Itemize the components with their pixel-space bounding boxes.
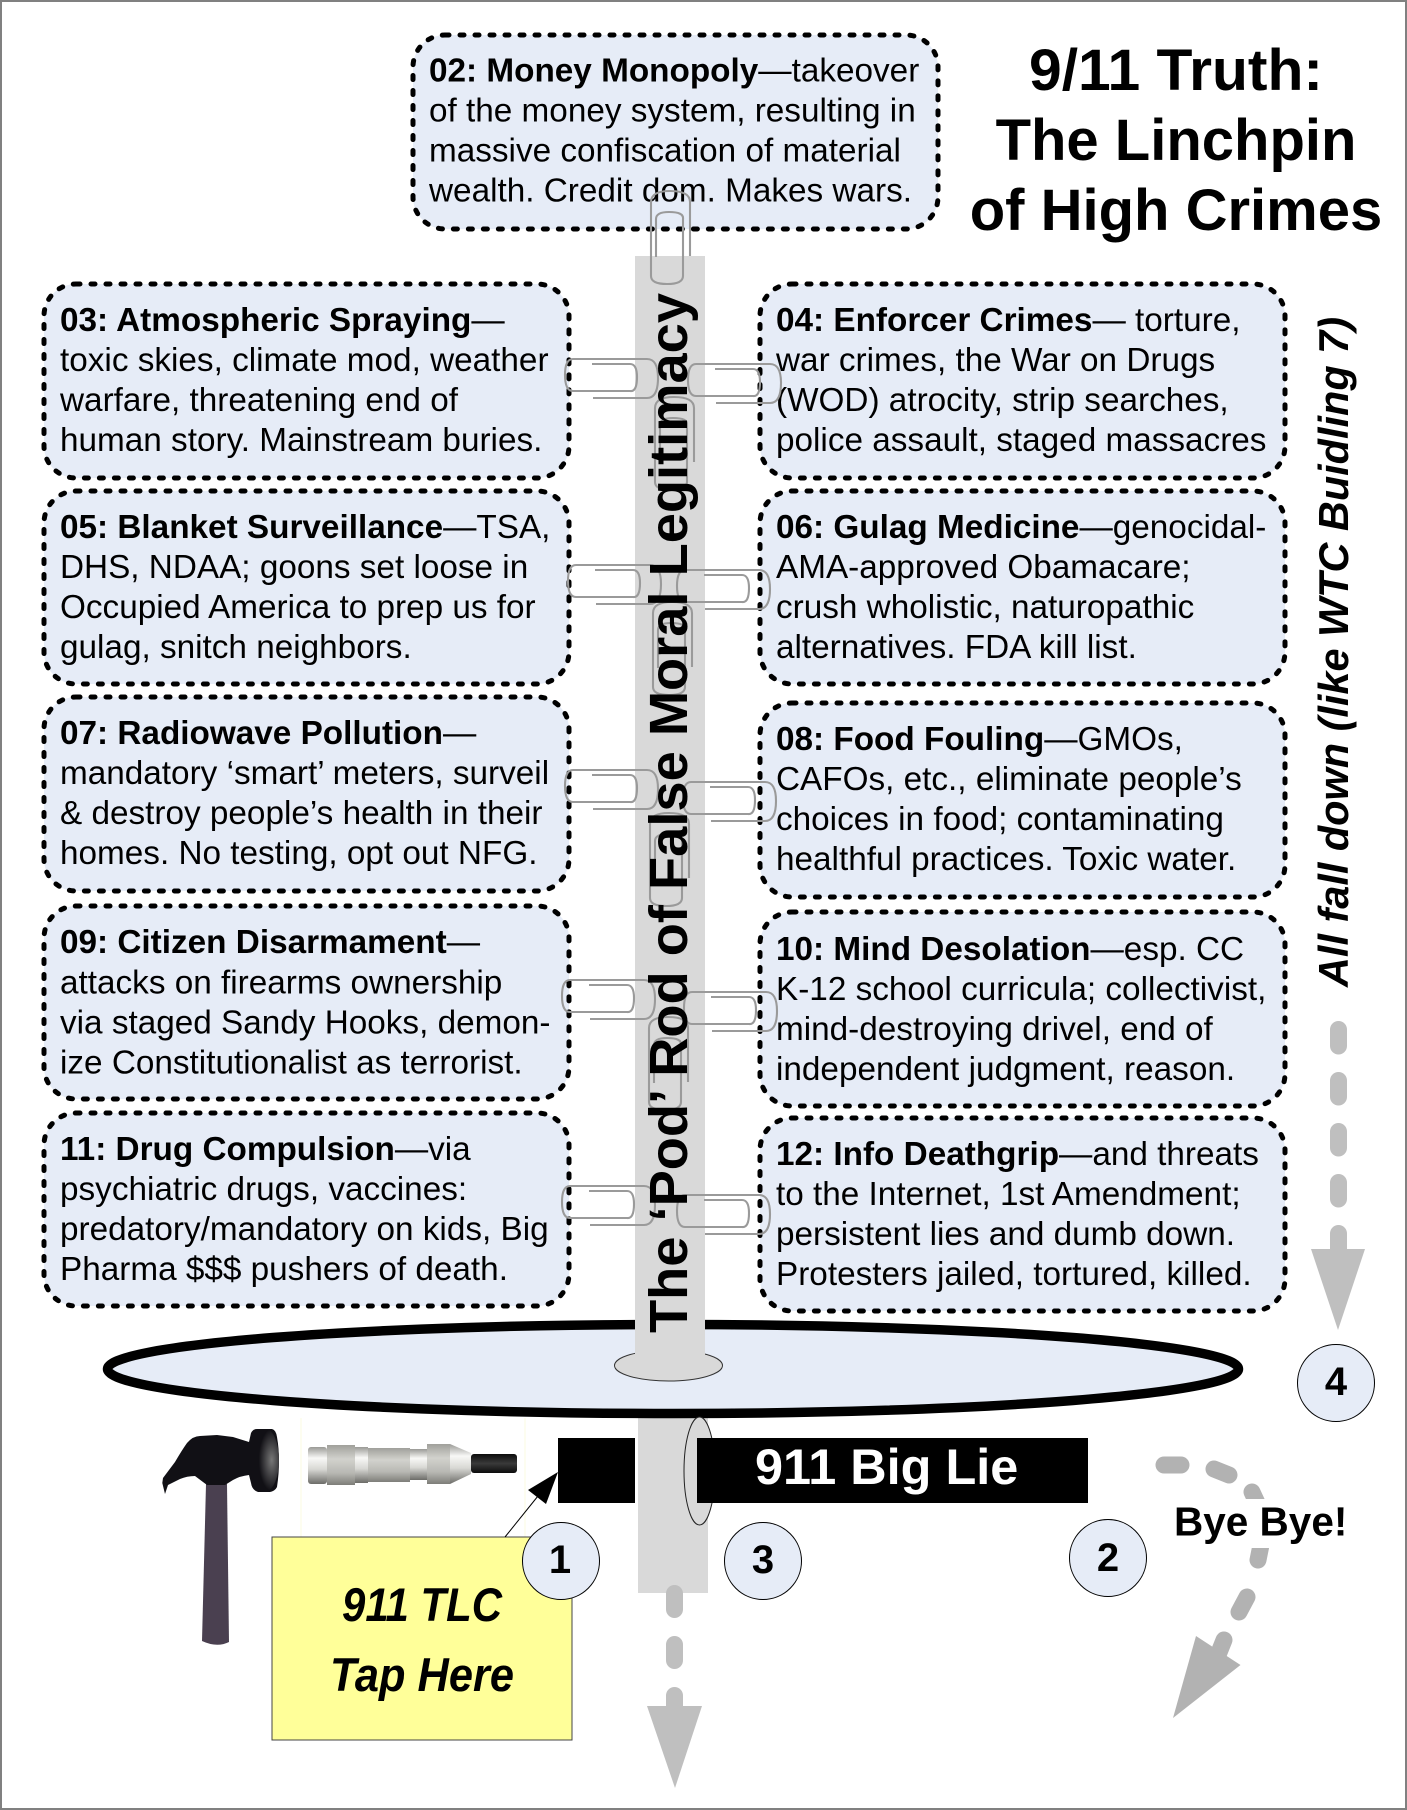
panel: 02 Money Monopoly: massive confiscation of material — [429, 132, 901, 170]
step circle 4 — [1298, 1344, 1374, 1422]
panel: 07 Radiowave Pollution: 07: Radiowave Pollution— — [60, 715, 477, 752]
step circle 2 — [1070, 1520, 1146, 1596]
panel: 03 Atmospheric Spraying: human story. Mainstream buries. — [60, 422, 542, 459]
panel: 04 Enforcer Crimes: 04: Enforcer Crimes— torture, — [776, 302, 1240, 339]
panel: 12 Info Deathgrip: Protesters jailed, tortured, killed. — [776, 1256, 1252, 1293]
panel: 09 Citizen Disarmament: via staged Sandy Hooks, demon- — [60, 1004, 550, 1042]
panel: 06 Gulag Medicine — [760, 491, 1285, 684]
rod label: The ‘Pod’ Rod of False Moral Legitimacy — [639, 293, 699, 1333]
side label: all fall down: All fall down (like WTC Buidling 7) — [1310, 317, 1357, 988]
callout: 911 TLC Tap Here note: Tap Here — [330, 1648, 514, 1701]
panel: 12 Info Deathgrip: to the Internet, 1st Amendment; — [776, 1176, 1241, 1213]
paperclips — [562, 191, 781, 1234]
arrow: bar flying away — [1164, 1465, 1261, 1718]
panel: 02 Money Monopoly: of the money system, resulting in — [429, 92, 916, 130]
black bar: 911 Big Lie — [697, 1438, 1088, 1503]
panel: 08 Food Fouling: healthful practices. Toxic water. — [776, 841, 1236, 878]
arrow: note to bar — [505, 1472, 558, 1537]
panel: 04 Enforcer Crimes: police assault, staged massacres — [776, 422, 1266, 459]
callout: 911 TLC Tap Here note: 911 TLC — [342, 1578, 503, 1631]
title: 9/11 Truth: — [1029, 38, 1323, 103]
icon: automatic center punch tool — [308, 1444, 517, 1485]
black bar: left stub — [558, 1438, 635, 1503]
panel: 06 Gulag Medicine: alternatives. FDA kill list. — [776, 629, 1137, 666]
black bar: 911 Big Lie: 911 Big Lie — [755, 1438, 1018, 1495]
panel: 02 Money Monopoly: 02: Money Monopoly—takeover — [429, 52, 919, 90]
panel: 05 Blanket Surveillance — [44, 491, 569, 684]
title: of High Crimes — [970, 178, 1382, 243]
rod foot — [614, 1350, 722, 1381]
arrow: rod falling down — [647, 1594, 702, 1788]
panel: 11 Drug Compulsion: psychiatric drugs, vaccines: — [60, 1171, 467, 1208]
panel: 09 Citizen Disarmament: ize Constitutionalist as terrorist. — [60, 1044, 523, 1082]
panel: 10 Mind Desolation: independent judgment, reason. — [776, 1051, 1235, 1088]
panel: 08 Food Fouling — [760, 703, 1285, 897]
step circle 1: 1 — [549, 1538, 571, 1582]
panel: 07 Radiowave Pollution: homes. No testing, opt out NFG. — [60, 835, 537, 872]
panel: 03 Atmospheric Spraying: toxic skies, climate mod, weather — [60, 342, 549, 379]
panel: 10 Mind Desolation: mind-destroying drivel, end of — [776, 1011, 1214, 1048]
disc platform — [108, 1324, 1238, 1414]
panel: 07 Radiowave Pollution — [44, 697, 569, 891]
panel: 07 Radiowave Pollution: & destroy people’s health in their — [60, 795, 542, 832]
panel: 10 Mind Desolation: 10: Mind Desolation—esp. CC — [776, 931, 1244, 968]
panel: 02 Money Monopoly — [413, 35, 938, 229]
panel: 04 Enforcer Crimes — [760, 284, 1285, 478]
panel: 11 Drug Compulsion: predatory/mandatory on kids, Big — [60, 1211, 549, 1248]
label: Bye Bye!: Bye Bye! — [1174, 1498, 1347, 1544]
thin ellipse: cut through the lie bar — [684, 1417, 715, 1525]
icon: hammer — [162, 1429, 279, 1645]
upper section of the rod — [635, 256, 705, 1362]
panel: 06 Gulag Medicine: 06: Gulag Medicine—genocidal- — [776, 509, 1266, 546]
step circle 4: 4 — [1325, 1360, 1348, 1404]
panel: 05 Blanket Surveillance: 05: Blanket Surveillance—TSA, — [60, 509, 550, 546]
panel: 11 Drug Compulsion: Pharma $$$ pushers of death. — [60, 1251, 508, 1288]
panel: 12 Info Deathgrip — [760, 1118, 1285, 1311]
panel: 05 Blanket Surveillance: DHS, NDAA; goons set loose in — [60, 549, 528, 586]
panel: 06 Gulag Medicine: AMA-approved Obamacare; — [776, 549, 1191, 586]
panel: 03 Atmospheric Spraying: warfare, threatening end of — [59, 382, 459, 419]
step circle 2: 2 — [1097, 1536, 1119, 1580]
panel: 04 Enforcer Crimes: war crimes, the War on Drugs — [775, 342, 1215, 379]
step circle 3 — [724, 1522, 802, 1600]
panel: 02 Money Monopoly: wealth. Credit dom. Makes wars. — [428, 172, 912, 210]
lower section of the rod — [638, 1410, 708, 1593]
panel: 11 Drug Compulsion — [44, 1113, 569, 1306]
panel: 05 Blanket Surveillance: Occupied America to prep us for — [60, 589, 536, 626]
panel: 03 Atmospheric Spraying: 03: Atmospheric Spraying— — [60, 302, 505, 339]
step circle 3: 3 — [752, 1538, 774, 1582]
panel: 09 Citizen Disarmament: 09: Citizen Disarmament— — [60, 924, 481, 961]
callout: 911 TLC Tap Here note — [272, 1537, 572, 1740]
arrow: falling down to circle 4 — [1311, 1030, 1365, 1330]
panel: 08 Food Fouling: CAFOs, etc., eliminate people’s — [776, 761, 1242, 798]
faint image edges — [301, 1418, 525, 1537]
panel: 10 Mind Desolation: K-12 school curricula; collectivist, — [776, 971, 1266, 1008]
panel: 06 Gulag Medicine: crush wholistic, naturopathic — [776, 589, 1194, 626]
panel: 10 Mind Desolation — [760, 912, 1285, 1106]
title: The Linchpin — [996, 108, 1356, 173]
panel: 04 Enforcer Crimes: (WOD) atrocity, strip searches, — [776, 382, 1229, 419]
panel: 08 Food Fouling: choices in food; contaminating — [776, 801, 1224, 838]
panel: 09 Citizen Disarmament — [44, 906, 569, 1099]
panel: 08 Food Fouling: 08: Food Fouling—GMOs, — [776, 721, 1183, 758]
panel: 12 Info Deathgrip: 12: Info Deathgrip—and threats — [776, 1136, 1259, 1173]
panel: 03 Atmospheric Spraying — [44, 284, 569, 478]
panel: 05 Blanket Surveillance: gulag, snitch neighbors. — [60, 629, 412, 666]
title — [970, 38, 1382, 243]
panel: 09 Citizen Disarmament: attacks on firearms ownership — [60, 964, 502, 1002]
panel: 12 Info Deathgrip: persistent lies and dumb down. — [776, 1216, 1235, 1253]
step circle 1 — [522, 1522, 600, 1600]
panel: 07 Radiowave Pollution: mandatory ‘smart’ meters, surveil — [60, 755, 549, 792]
panel: 11 Drug Compulsion: 11: Drug Compulsion—via — [60, 1131, 471, 1168]
